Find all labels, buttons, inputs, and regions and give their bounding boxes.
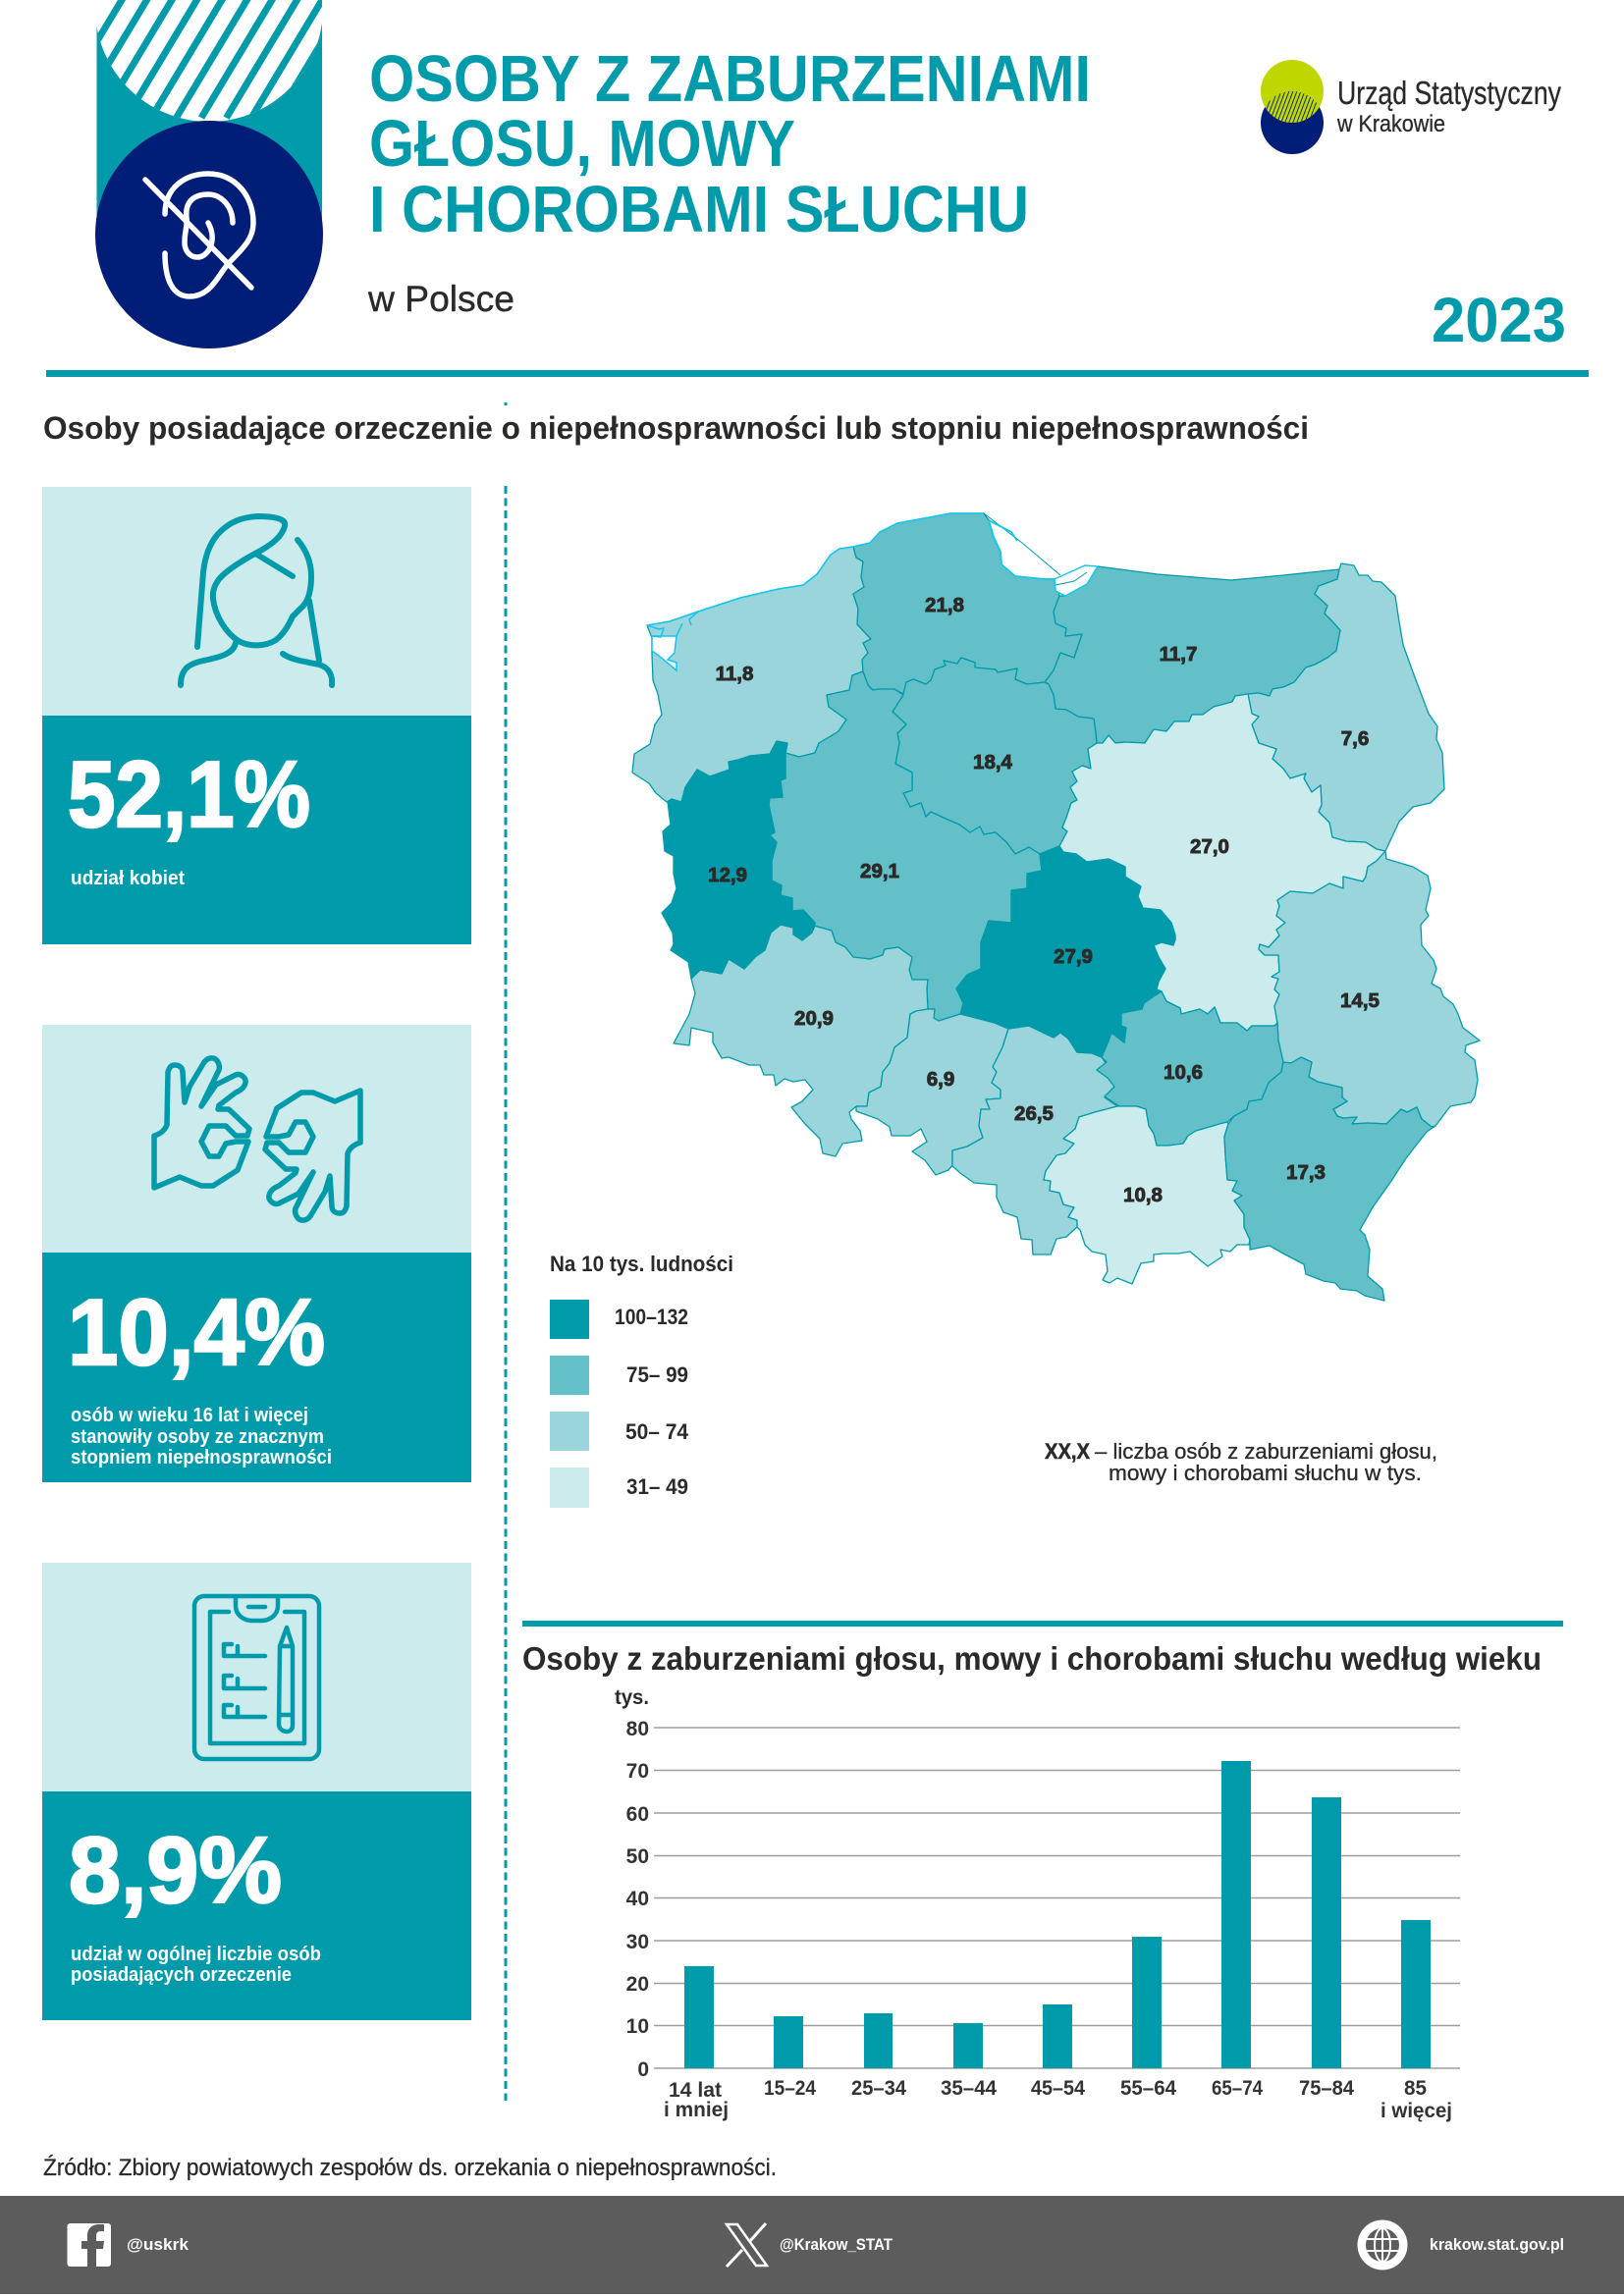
region: opolskie [856,1009,1008,1175]
age category labels: 65–74 [1212,2077,1263,2100]
region: zachodniopomorskie [632,547,871,802]
age category labels [664,2077,1452,2122]
caption: udział w ogólnej liczbie osób [71,1944,321,1965]
section heading: orzeczenie: Osoby posiadające orzeczenie o niepełnosprawności lub stopniu niepełnosprawności [43,410,1309,446]
bar chart: people by age: 80 [626,1718,649,1740]
region: pomorskie [853,513,1082,694]
age category labels: 55–64 [1120,2077,1176,2100]
age category labels: i więcej [1380,2100,1452,2122]
age category labels: 14 lat [669,2079,722,2102]
bar chart: people by age: 50 [626,1845,649,1868]
regional values: 27,0 [1190,835,1229,858]
coast, lagoons and Hel peninsula [647,513,1098,670]
age category labels: 75–84 [1299,2077,1354,2100]
map note: XX,X [1045,1439,1090,1464]
map legend [550,1252,733,1508]
regional values: 27,9 [1054,945,1093,968]
bar chart: people by age: 60 [626,1803,649,1826]
caption: stanowiły osoby ze znacznym [71,1426,324,1448]
regional values: 10,8 [1123,1184,1163,1206]
regional values: 6,9 [927,1068,954,1091]
caption: udział kobiet [71,868,185,889]
region: podlaskie [1248,563,1444,851]
logo: Urząd Statystyczny w Krakowie: Urząd Statystyczny [1337,75,1561,111]
icon: sign language hands [154,1058,360,1220]
bar chart: people by age: tys. [615,1686,649,1709]
map note: mowy i chorobami słuchu w tys. [1109,1461,1422,1485]
regional values: 10,6 [1164,1061,1203,1084]
regional values: 11,7 [1160,643,1197,666]
region: świętokrzyskie [1097,991,1283,1146]
regional values: 14,5 [1340,989,1380,1012]
icon: clipboard with pencil [194,1596,319,1759]
icon: woman [181,516,332,685]
region: wielkopolskie [769,671,1042,1021]
region: lubuskie [662,741,815,979]
source note: Źródło: Zbiory powiatowych zespołów ds. orzekania o niepełnosprawności. [43,2155,777,2181]
panel: 8,9% [42,1563,471,2020]
title: OSOBY Z ZABURZENIAMI [369,42,1091,116]
map legend: Na 10 tys. ludności [550,1252,733,1276]
value: 8,9% [69,1818,282,1923]
value: 52,1% [68,742,310,847]
bar chart: people by age: 30 [626,1931,649,1953]
map legend: 75– 99 [626,1362,688,1387]
section heading: age chart: Osoby z zaburzeniami głosu, mowy i chorobami słuchu według wieku [522,1640,1542,1677]
bar chart: people by age: 20 [626,1973,649,1996]
region: warmińsko-mazurskie [1045,566,1340,743]
subtitle: w Polsce [367,279,514,319]
title: I CHOROBAMI SŁUCHU [369,173,1029,246]
title [369,42,1091,246]
regional values [708,594,1380,1206]
panel: 10,4% [42,1025,471,1482]
regional values: 29,1 [860,860,899,882]
regional values: 21,8 [925,594,964,616]
value: 10,4% [68,1280,325,1385]
map of Poland by voivodeship [632,513,1480,1301]
region: mazowieckie [1059,694,1385,1031]
caption: osób w wieku 16 lat i więcej [71,1405,308,1426]
regional values: 17,3 [1286,1161,1326,1184]
icon: X [727,2223,767,2267]
age category labels: 45–54 [1031,2077,1085,2100]
caption [71,1405,332,1468]
map note [1045,1439,1437,1485]
logo: Urząd Statystyczny w Krakowie: w Krakowie [1336,111,1445,137]
footer bar: @uskrk [127,2235,189,2254]
icon: facebook [67,2223,111,2267]
region: podkarpackie [1224,1057,1435,1301]
bar chart: people by age: 40 [626,1888,649,1910]
icon: crossed-out ear [145,174,253,296]
footer bar: krakow.stat.gov.pl [1430,2235,1564,2254]
regional values: 26,5 [1014,1102,1054,1125]
regional values: 20,9 [794,1007,834,1030]
map legend: 31– 49 [626,1474,688,1499]
logo: Urząd Statystyczny w Krakowie [1253,60,1561,154]
caption: stopniem niepełnosprawności [71,1447,332,1468]
map legend: 100–132 [615,1305,688,1329]
footer bar: @Krakow_STAT [780,2235,893,2254]
regional values: 11,8 [716,663,753,685]
header emblem: ear icon on striped band [95,0,323,348]
caption: posiadających orzeczenie [71,1964,292,1986]
caption [71,1944,321,1986]
bar chart: people by age: 70 [626,1760,649,1783]
region: lubelskie [1259,851,1480,1127]
title: GŁOSU, MOWY [369,107,795,181]
map legend: 50– 74 [625,1419,689,1444]
age category labels: i mniej [664,2099,729,2121]
icon: globe [1357,2220,1408,2269]
map note: – liczba osób z zaburzeniami głosu, [1095,1439,1437,1464]
year: 2023 [1432,285,1566,355]
age category labels: 85 [1404,2077,1427,2100]
regional values: 7,6 [1341,727,1369,750]
footer bar [0,2196,1624,2294]
region: łódzkie [956,846,1175,1057]
bar chart: people by age: 10 [626,2015,649,2038]
regional values: 18,4 [973,751,1013,774]
region: śląskie [952,1026,1117,1255]
regional values: 12,9 [708,864,747,886]
bar chart: people by age [615,1686,1460,2122]
panel: 52,1% women [42,487,471,944]
region: małopolskie [1044,1106,1250,1284]
age category labels: 25–34 [851,2077,906,2100]
region: dolnośląskie [674,925,928,1156]
age category labels: 15–24 [764,2077,816,2100]
age category labels: 35–44 [941,2077,997,2100]
region: kujawsko-pomorskie [893,658,1097,854]
bars [684,1761,1431,2068]
bar chart: people by age: 0 [637,2058,649,2081]
